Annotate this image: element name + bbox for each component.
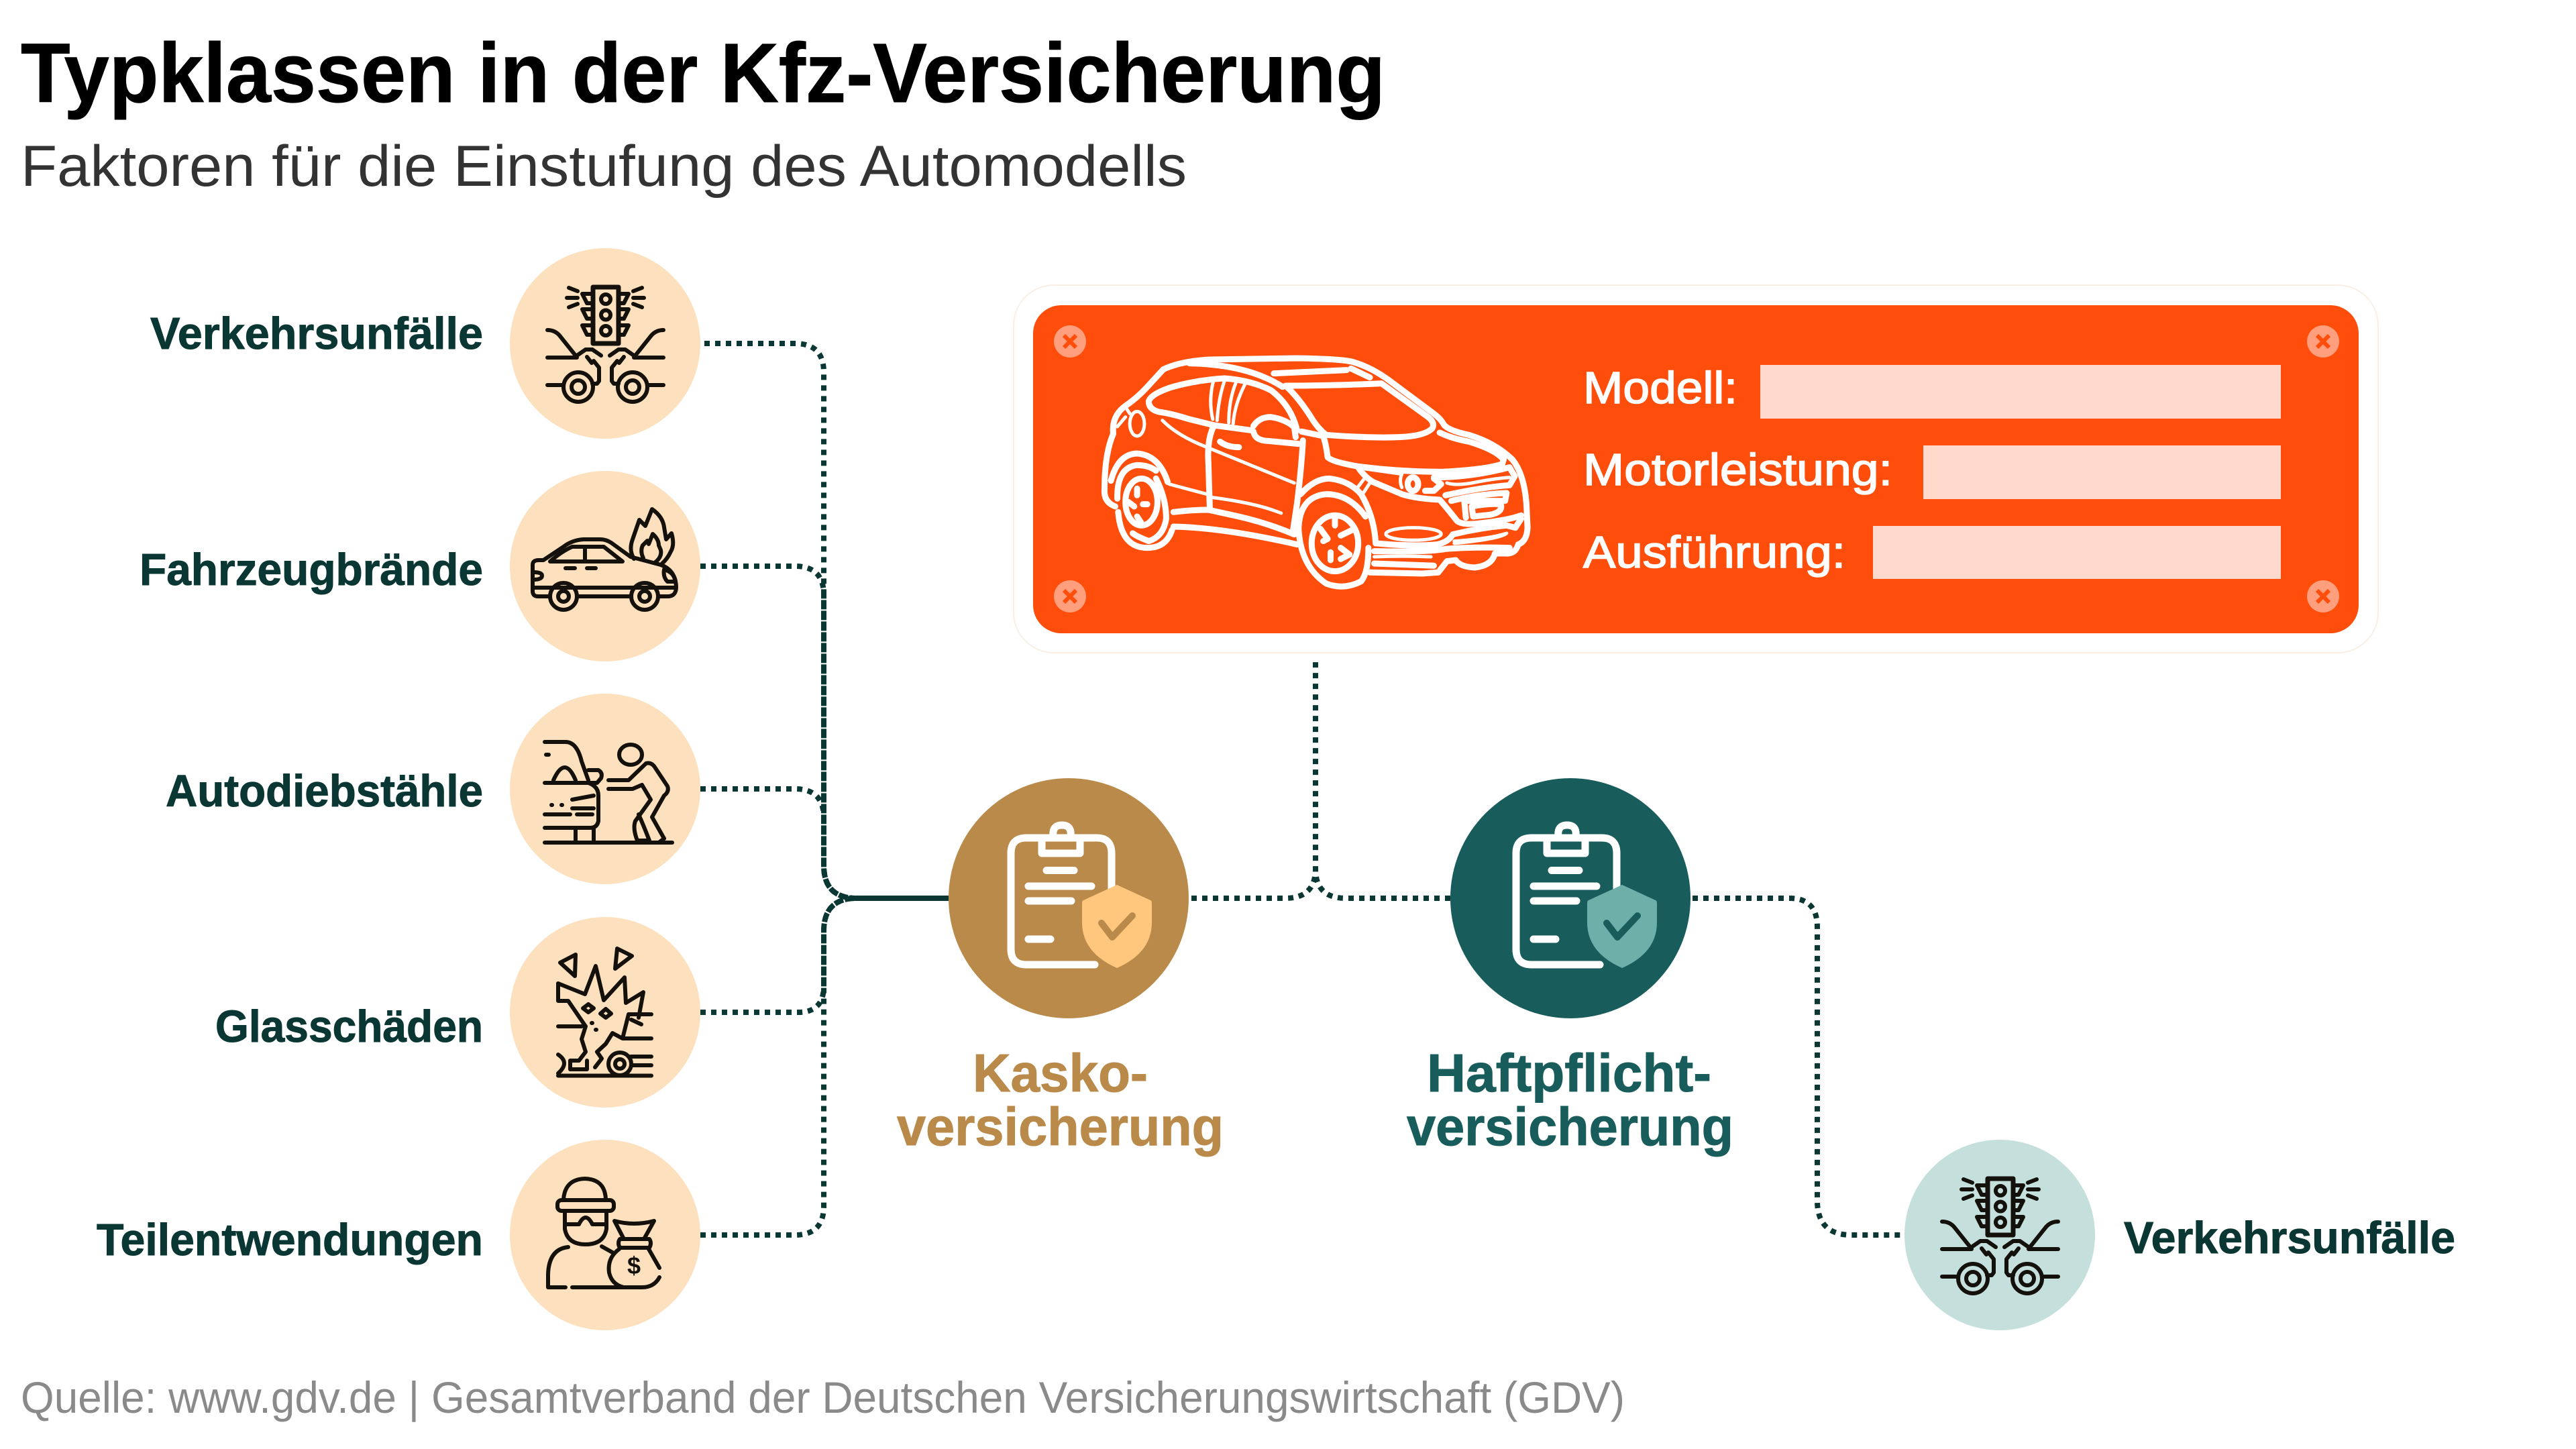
field: Ausführung: Ausführung:: [1583, 527, 1845, 578]
label: Teilentwendungen: Teilentwendungen: [97, 1215, 483, 1265]
heading: Haftpflichtversicherung: Haftpflicht-: [1427, 1043, 1711, 1103]
panel: vehicle plate: [1014, 285, 2378, 653]
heading: Haftpflichtversicherung: versicherung: [1407, 1097, 1733, 1157]
icon: car theft on peach circle: [510, 694, 700, 884]
heading: Kaskoversicherung: versicherung: [897, 1097, 1224, 1157]
icon: thief with money bag on peach circle: [510, 1140, 700, 1330]
label: Verkehrsunfälle: Verkehrsunfälle: [150, 309, 483, 359]
field: Modell: [1583, 363, 2281, 419]
heading: Haftpflichtversicherung: [1407, 1043, 1733, 1157]
source note: Quelle: www.gdv.de | Gesamtverband der Deutschen Versicherungswirtschaft (GDV): [21, 1373, 1625, 1422]
heading: Kaskoversicherung: [897, 1043, 1224, 1157]
icon: burning car on peach circle: [510, 471, 700, 661]
subtitle: Faktoren für die Einstufung des Automodells: [21, 134, 1187, 199]
title: Typklassen in der Kfz-Versicherung: [21, 27, 1385, 120]
icon: Haftpflicht clipboard with shield: [1450, 778, 1690, 1018]
field: Motorleistung: [1583, 445, 2281, 499]
icon: Kasko clipboard with shield: [949, 778, 1189, 1018]
label: Glasschäden: Glasschäden: [215, 1002, 483, 1052]
label: Fahrzeugbrände: Fahrzeugbrände: [140, 545, 483, 595]
icon: traffic accident on teal circle: [1904, 1140, 2095, 1330]
field: Ausführung: [1583, 526, 2281, 579]
icon: glass damage on peach circle: [510, 917, 700, 1108]
icon: traffic accident on peach circle: [510, 248, 700, 439]
plate outer frame: [1014, 285, 2378, 653]
icon: car outline: [1104, 358, 1527, 586]
icon: thief with money bag on peach circle: $: [627, 1252, 641, 1279]
dotted connector lines: [700, 343, 1904, 1235]
plate body: [1033, 305, 2359, 633]
screws: [1054, 325, 2339, 612]
label: Verkehrsunfälle right: Verkehrsunfälle: [2124, 1213, 2455, 1263]
field: Motorleistung: Motorleistung:: [1583, 445, 1892, 495]
field: Modell: Modell:: [1583, 363, 1737, 413]
heading: Kaskoversicherung: Kasko-: [973, 1043, 1148, 1103]
label: Autodiebstähle: Autodiebstähle: [166, 766, 483, 816]
